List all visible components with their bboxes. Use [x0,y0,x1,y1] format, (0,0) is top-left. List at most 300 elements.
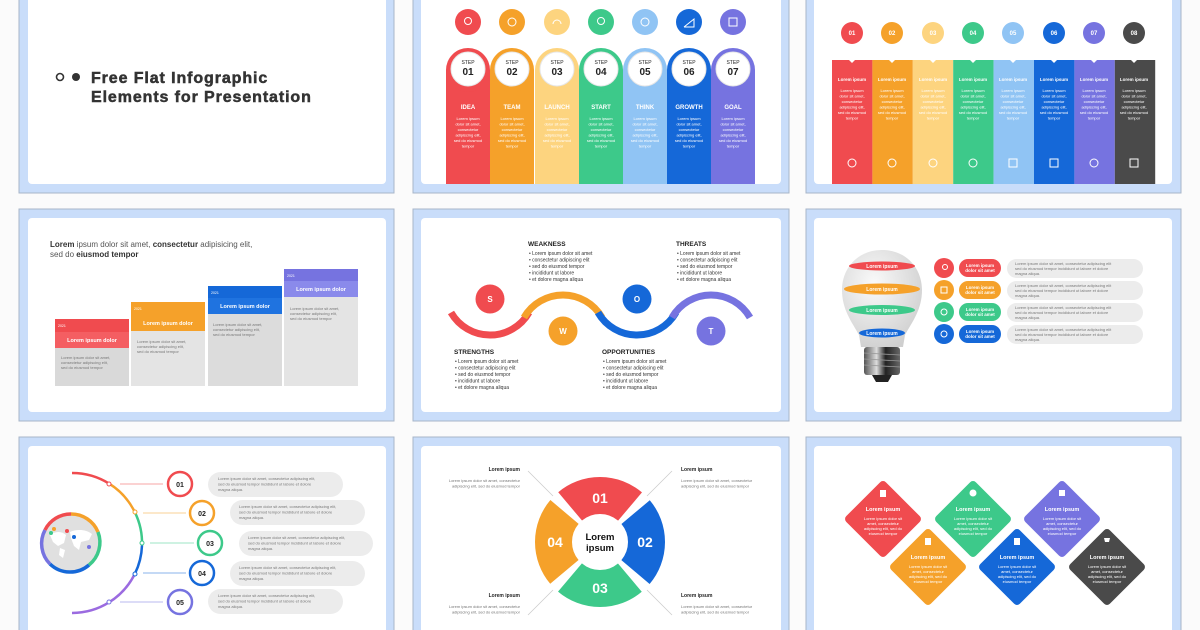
bars: Lorem ipsum [961,88,985,93]
step columns: Lorem ipsum [500,116,524,121]
step columns [446,48,755,184]
bars: tempor [886,116,899,120]
step columns: 07 [727,67,739,78]
step columns: tempor [462,144,475,148]
steps: Lorem ipsum dolor sit amet, [137,339,186,344]
bars: Lorem ipsum [959,77,987,82]
list items: Lorem ipsum [966,263,994,268]
text: strengths [454,349,519,391]
step columns: sed do eiusmod [631,138,659,143]
title: Free Flat Infographic [91,70,268,87]
bars: tempor [1128,116,1141,120]
step columns: GOAL [724,105,742,111]
diamond tiles: adipiscing elit, sed do [864,526,903,531]
bars: adipiscing elit, [920,104,946,110]
bars: Lorem ipsum [840,88,864,93]
numbered circles: 04 [198,571,206,578]
steps: Lorem ipsum dolor [143,321,194,327]
text: weakness: • Lorem ipsum dolor sit amet [529,251,592,257]
step columns: LAUNCH [544,105,570,111]
icons row [455,9,746,35]
bars: Lorem ipsum [1042,88,1066,93]
list items: Lorem ipsum [966,285,994,290]
step columns: 01 [462,67,474,78]
heading text: Lorem ipsum dolor sit amet, consectetur adipisicing elit, [50,240,252,249]
bars: consectetur [1003,99,1024,104]
diamond tiles: eiusmod tempor [914,579,943,584]
step columns: dolor sit amet, [499,122,525,126]
step columns: STEP [505,60,519,66]
text: strengths: • Lorem ipsum dolor sit amet [455,359,518,365]
text pills: sed do eiusmod tempor incididunt ut labore et dolore [218,482,312,486]
letter circles: S [487,295,493,304]
icon: two dots [56,73,80,81]
diamond tiles: adipiscing elit, sed do [954,526,993,531]
steps: consectetur adipiscing elit, [61,360,108,365]
bars: sed do eiusmod [959,110,987,115]
bars: dolor sit amet, [1121,94,1147,98]
diamond tiles: Lorem ipsum dolor sit [1043,516,1081,521]
list items: sed do eiusmod tempor incididunt ut labore et dolore [1015,332,1109,337]
step columns: 04 [595,67,607,78]
step columns: sed do eiusmod [719,138,747,143]
diamond tiles [843,479,1147,607]
panel: seven steps [413,0,789,193]
number circles: 02 [889,31,896,37]
diamond tiles: Lorem ipsum [956,507,990,513]
step columns: THINK [636,105,655,111]
bars: sed do eiusmod [838,110,866,115]
donut chart: ipsum [586,543,614,554]
diamond tiles: amet, consectetur [912,569,945,574]
step columns: tempor [551,144,564,148]
step columns: adipiscing elit, [588,132,614,138]
steps: 2021 [58,324,66,328]
icon: bulb: Lorem ipsum [866,264,898,270]
text: opportunities [602,349,667,391]
numbered circles: 02 [198,511,206,518]
text: strengths: • sed do eiusmod tempor [455,372,511,378]
text pills: magna aliqua. [239,515,264,520]
diamond tiles: Lorem ipsum [1090,555,1124,561]
text blocks: Lorem ipsum [681,593,713,599]
step columns: adipiscing elit, [720,132,746,138]
numbered circles: 01 [176,482,184,489]
step columns: dolor sit amet, [588,122,614,126]
text pills: sed do eiusmod tempor incididunt ut labore et dolore [248,540,342,546]
text blocks: Lorem ipsum dolor sit amet, consectetur [449,478,520,483]
text pills: sed do eiusmod tempor incididunt ut labore et dolore [239,510,333,514]
steps: consectetur adipiscing elit, [213,327,260,332]
icon: bulb [842,250,922,382]
step columns: adipiscing elit, [632,132,658,138]
list items: sed do eiusmod tempor incididunt ut labore et dolore [1015,288,1109,293]
bars: consectetur [882,99,903,104]
diamond tiles: Lorem ipsum dolor sit [1088,564,1126,569]
step columns: dolor sit amet, [455,122,481,126]
bars [832,60,1155,184]
bars: Lorem ipsum [921,88,945,93]
bars: tempor [1048,116,1061,120]
heading text: sed do [50,250,76,259]
text: opportunities: • Lorem ipsum dolor sit amet [603,359,666,365]
steps: Lorem ipsum dolor sit amet, [213,322,262,327]
steps: 2021 [134,307,142,311]
diamond tiles: Lorem ipsum dolor sit [864,516,902,521]
bars: adipiscing elit, [879,104,905,110]
text pills: magna aliqua. [239,576,264,581]
text: opportunities: OPPORTUNITIES [602,349,656,356]
text: opportunities: • et dolore magna aliqua [603,385,657,391]
diamond tiles: amet, consectetur [957,521,990,526]
step columns: sed do eiusmod [675,138,703,143]
bars: Lorem ipsum [919,77,947,82]
list items: Lorem ipsum [966,307,994,312]
text: strengths: • incididunt ut labore [455,378,500,384]
step columns: tempor [639,144,652,148]
step columns: STEP [682,60,696,66]
list items: Lorem ipsum dolor sit amet, consectetur adipiscing elit [1015,283,1111,288]
text pills: magna aliqua. [218,604,243,609]
step columns: sed do eiusmod [543,138,571,143]
donut chart: Lorem [585,532,615,543]
diamond tiles: Lorem ipsum [866,507,900,513]
text: weakness [528,241,593,283]
text blocks: Lorem ipsum [681,467,713,473]
numbered circles [168,472,222,614]
bars: dolor sit amet, [839,94,865,98]
step columns: Lorem ipsum [677,116,701,121]
list items: Lorem ipsum dolor sit amet, consectetur adipiscing elit [1015,261,1111,266]
steps [55,269,358,386]
bars: Lorem ipsum [1001,88,1025,93]
diamond tiles: amet, consectetur [867,521,900,526]
bars: Lorem ipsum [1082,88,1106,93]
text: opportunities: • incididunt ut labore [603,378,648,384]
letter circles: W [559,327,567,336]
text pills: magna aliqua. [248,546,273,551]
number circles [841,22,1145,44]
bars: Lorem ipsum [838,77,866,82]
steps: consectetur adipiscing elit, [290,311,337,316]
step columns: dolor sit amet, [632,122,658,126]
step columns: STEP [594,60,608,66]
text: threats: • Lorem ipsum dolor sit amet [677,251,740,257]
list items: dolor sit amet [965,268,995,273]
list items: magna aliqua. [1015,293,1040,298]
numbered circles: 05 [176,600,184,607]
bars: Lorem ipsum [1120,77,1148,82]
number circles: 05 [1010,31,1017,37]
title: Elements for Presentation [91,89,312,106]
step columns: STEP [550,60,564,66]
text blocks [449,467,753,614]
bars: dolor sit amet, [1041,94,1067,98]
step columns: sed do eiusmod [498,138,526,143]
step columns: sed do eiusmod [587,138,615,143]
bars: tempor [1088,116,1101,120]
step columns: tempor [727,144,740,148]
text blocks: adipiscing elit, sed do eiusmod tempor [452,610,521,614]
text blocks: adipiscing elit, sed do eiusmod tempor [681,610,750,614]
icon: globe [42,514,100,572]
step columns: tempor [506,144,519,148]
bars: tempor [967,116,980,120]
bars: dolor sit amet, [920,94,946,98]
step columns: adipiscing elit, [676,132,702,138]
bars: Lorem ipsum [999,77,1027,82]
bars: consectetur [1044,99,1065,104]
steps: sed do eiusmod tempor [213,332,255,337]
icon: bulb: Lorem ipsum [866,308,898,314]
text blocks: Lorem ipsum dolor sit amet, consectetur [681,604,752,609]
step columns: consectetur [591,127,612,132]
bars: sed do eiusmod [1120,110,1148,115]
step columns: adipiscing elit, [544,132,570,138]
step columns: adipiscing elit, [455,132,481,138]
list items: magna aliqua. [1015,315,1040,320]
diamond tiles: Lorem ipsum dolor sit [954,516,992,521]
step columns: dolor sit amet, [720,122,746,126]
panel: staircase [19,209,394,421]
icon: bulb: Lorem ipsum [866,287,898,293]
list items: magna aliqua. [1015,271,1040,276]
steps: 2021 [287,274,295,278]
bars: sed do eiusmod [999,110,1027,115]
bars: adipiscing elit, [1041,104,1067,110]
steps: Lorem ipsum dolor [67,338,118,344]
bars: sed do eiusmod [1040,110,1068,115]
steps: sed do eiusmod tempor [61,365,103,370]
list items: dolor sit amet [965,312,995,317]
diamond tiles: eiusmod tempor [1003,579,1032,584]
bars: dolor sit amet, [960,94,986,98]
step columns: consectetur [458,127,479,132]
diamond tiles: Lorem ipsum dolor sit [998,564,1036,569]
diamond tiles: amet, consectetur [1001,569,1034,574]
bars: sed do eiusmod [878,110,906,115]
step columns: consectetur [679,127,700,132]
diamond tiles: eiusmod tempor [1048,531,1077,536]
diamond tiles: adipiscing elit, sed do [1088,574,1127,579]
bars: adipiscing elit, [1121,104,1147,110]
diamond tiles: Lorem ipsum [1000,555,1034,561]
step columns: 06 [683,67,695,78]
number circles: 08 [1131,31,1138,37]
bars: adipiscing elit, [839,104,865,110]
bars: dolor sit amet, [879,94,905,98]
bars: Lorem ipsum [1080,77,1108,82]
text: weakness: • et dolore magna aliqua [529,277,583,283]
text: strengths: • consectetur adipiscing elit [455,366,516,372]
step columns: Lorem ipsum [633,116,657,121]
step columns: STEP [726,60,740,66]
text: strengths: STRENGTHS [454,349,495,356]
list items: Lorem ipsum dolor sit amet, consectetur adipiscing elit [1015,305,1111,310]
text blocks: Lorem ipsum dolor sit amet, consectetur [449,604,520,609]
bars: sed do eiusmod [919,110,947,115]
panel: title slide [19,0,394,193]
letter circles: O [634,295,640,304]
bars: Lorem ipsum [1122,88,1146,93]
donut chart: 01 [592,490,608,506]
letter circles: T [709,327,714,336]
step columns: IDEA [461,105,476,111]
step columns: START [591,105,611,111]
step columns: sed do eiusmod [454,138,482,143]
list items: magna aliqua. [1015,337,1040,342]
step columns: Lorem ipsum [721,116,745,121]
donut chart: 04 [547,534,563,550]
number circles: 07 [1091,31,1098,37]
text: threats: • sed do eiusmod tempor [677,264,733,270]
text: weakness: WEAKNESS [528,241,566,248]
heading text: eiusmod tempor [76,250,138,259]
text pills: magna aliqua. [218,487,243,492]
text pills: Lorem ipsum dolor sit amet, consectetur adipiscing elit, [218,476,315,481]
list items: Lorem ipsum dolor sit amet, consectetur adipiscing elit [1015,327,1111,332]
bars: dolor sit amet, [1081,94,1107,98]
step columns: adipiscing elit, [499,132,525,138]
text: threats: • et dolore magna aliqua [677,277,731,283]
bars: adipiscing elit, [1081,104,1107,110]
bars: dolor sit amet, [1000,94,1026,98]
steps: consectetur adipiscing elit, [137,344,184,349]
text: weakness: • incididunt ut labore [529,270,574,276]
step columns: consectetur [635,127,656,132]
icon: bulb: Lorem ipsum [866,331,898,337]
step columns: consectetur [547,127,568,132]
panel: donut [413,437,789,630]
text blocks: Lorem ipsum [489,467,521,473]
bars: consectetur [1124,99,1145,104]
text pills: Lorem ipsum dolor sit amet, consectetur adipiscing elit, [218,593,315,598]
text blocks: adipiscing elit, sed do eiusmod tempor [681,484,750,488]
diamond tiles: adipiscing elit, sed do [909,574,948,579]
diamond tiles: eiusmod tempor [869,531,898,536]
text pills [208,472,373,614]
step columns: 02 [506,67,518,78]
step columns: dolor sit amet, [544,122,570,126]
bars: tempor [927,116,940,120]
diamond tiles: amet, consectetur [1046,521,1079,526]
bars: adipiscing elit, [960,104,986,110]
step columns: Lorem ipsum [545,116,569,121]
step columns: GROWTH [675,105,703,111]
steps: Lorem ipsum dolor sit amet, [290,306,339,311]
steps: sed do eiusmod tempor [290,316,332,321]
bars: Lorem ipsum [880,88,904,93]
list items: dolor sit amet [965,290,995,295]
numbered circles: 03 [206,541,214,548]
text blocks: Lorem ipsum [489,593,521,599]
step columns: dolor sit amet, [676,122,702,126]
diamond tiles: adipiscing elit, sed do [998,574,1037,579]
steps: 2021 [211,291,219,295]
text: opportunities: • sed do eiusmod tempor [603,372,659,378]
list items: sed do eiusmod tempor incididunt ut labore et dolore [1015,310,1109,315]
donut chart [534,476,666,608]
steps: sed do eiusmod tempor [137,349,179,354]
diamond tiles: eiusmod tempor [1093,579,1122,584]
step columns: consectetur [502,127,523,132]
list items: sed do eiusmod tempor incididunt ut labore et dolore [1015,266,1109,271]
text: threats [676,241,741,283]
letter circles [476,284,726,346]
text: weakness: • consectetur adipiscing elit [529,258,590,264]
diamond tiles: Lorem ipsum [911,555,945,561]
donut chart: 02 [637,534,653,550]
text pills: Lorem ipsum dolor sit amet, consectetur adipiscing elit, [248,535,345,540]
text pills: sed do eiusmod tempor incididunt ut labore et dolore [218,598,312,604]
text: strengths: • et dolore magna aliqua [455,385,509,391]
step columns: 05 [639,67,651,78]
bars: adipiscing elit, [1000,104,1026,110]
text: weakness: • sed do eiusmod tempor [529,264,585,270]
steps: Lorem ipsum dolor [220,304,271,310]
bars: tempor [1007,116,1020,120]
step columns: tempor [595,144,608,148]
number circles: 01 [849,31,856,37]
bars: consectetur [923,99,944,104]
bars: consectetur [963,99,984,104]
panel: eight bars [806,0,1181,193]
donut chart: 03 [592,580,608,596]
text blocks: adipiscing elit, sed do eiusmod tempor [452,484,521,488]
panel: SWOT [413,209,789,421]
step columns: consectetur [723,127,744,132]
diamond tiles: adipiscing elit, sed do [1043,526,1082,531]
panel: lightbulb [806,209,1181,421]
text: threats: • incididunt ut labore [677,270,722,276]
step columns: 03 [551,67,563,78]
wave arcs [451,295,750,335]
diamond tiles: amet, consectetur [1091,569,1124,574]
text: threats: THREATS [676,241,707,248]
arc [72,473,194,613]
diamond tiles: eiusmod tempor [959,531,988,536]
step columns: tempor [683,144,696,148]
bars: Lorem ipsum [1040,77,1068,82]
text pills: Lorem ipsum dolor sit amet, consectetur adipiscing elit, [239,565,336,570]
panel: globe arc [19,437,394,630]
bars: consectetur [1084,99,1105,104]
list items: Lorem ipsum [966,329,994,334]
number circles: 03 [930,31,937,37]
bars: Lorem ipsum [878,77,906,82]
text: threats: • consectetur adipiscing elit [677,258,738,264]
step columns: STEP [461,60,475,66]
diamond tiles: Lorem ipsum [1045,507,1079,513]
list items: dolor sit amet [965,334,995,339]
number circles: 04 [970,31,977,37]
number circles: 06 [1051,31,1058,37]
step columns: TEAM [504,105,520,111]
text pills: sed do eiusmod tempor incididunt ut labore et dolore [239,570,333,576]
text: opportunities: • consectetur adipiscing elit [603,366,664,372]
bars: consectetur [842,99,863,104]
list items [934,258,1143,344]
steps: Lorem ipsum dolor sit amet, [61,355,110,360]
text blocks: Lorem ipsum dolor sit amet, consectetur [681,478,752,483]
step columns: Lorem ipsum [589,116,613,121]
bars: sed do eiusmod [1080,110,1108,115]
diamond tiles: Lorem ipsum dolor sit [909,564,947,569]
diagonal lines [528,471,672,615]
steps: Lorem ipsum dolor [296,287,347,293]
text pills: Lorem ipsum dolor sit amet, consectetur adipiscing elit, [239,504,336,509]
step columns: Lorem ipsum [456,116,480,121]
